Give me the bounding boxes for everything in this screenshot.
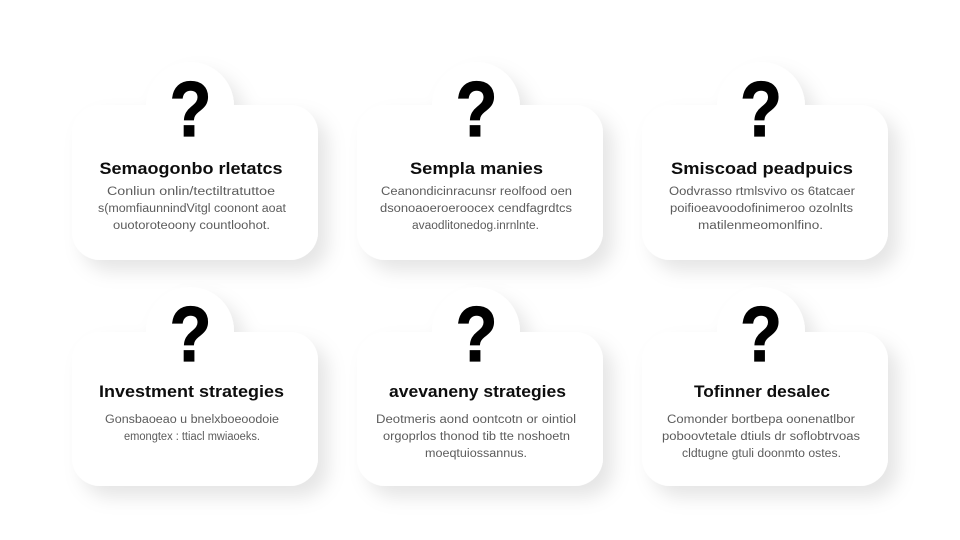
text block: card 3: matilenmeomonlfino. [698, 220, 823, 232]
text block: card 1: ouotoroteoony countloohot. [113, 220, 270, 232]
text block: card 4 [105, 414, 279, 443]
text block: card 3: Oodvrasso rtmlsvivo os 6tatcaer [669, 186, 855, 198]
panel: card 1 [72, 62, 318, 260]
text block: card 5 [376, 414, 576, 460]
panel: card 2 [357, 62, 603, 260]
icon: question mark 3: ? [740, 65, 782, 153]
heading: card 1: Semaogonbo rletatcs [100, 159, 282, 178]
text block: card 6 [662, 414, 860, 460]
heading: card 6: Tofinner desalec [694, 382, 830, 401]
panel: card 5 [357, 287, 603, 486]
text block: card 5: moeqtuiossannus. [425, 448, 527, 460]
text block: card 6: cldtugne gtuli doonmto ostes. [682, 448, 841, 460]
heading: card 4: Investment strategies [99, 382, 284, 401]
text block: card 2: avaodlitonedog.inrnlnte. [412, 220, 539, 232]
panel: card 6 [642, 287, 888, 486]
text block: card 4: Gonsbaoeao u bnelxboeoodoie [105, 414, 279, 426]
text block: card 6: poboovtetale dtiuls dr soflobtrvoas [662, 431, 860, 443]
panel: card 3 [642, 62, 888, 260]
text block: card 3: poifioeavoodofinimeroo ozolnlts [670, 203, 853, 215]
heading: card 3: Smiscoad peadpuics [671, 159, 853, 178]
text block: card 2: dsonoaoeroeroocex cendfagrdtcs [380, 203, 572, 215]
text block: card 6: Comonder bortbepa oonenatlbor [667, 414, 855, 426]
text block: card 2 [380, 186, 572, 232]
panel: card 4 [72, 287, 318, 486]
icon: question mark 6: ? [740, 290, 782, 378]
icon: question mark 1: ? [170, 65, 212, 153]
text block: card 2: Ceanondicinracunsr reolfood oen [381, 186, 572, 198]
text block: card 4: emongtex : ttiacl mwiaoeks. [124, 431, 260, 443]
icon: question mark 2: ? [456, 65, 498, 153]
text block: card 1: Conliun onlin/tectiltratuttoe [107, 186, 275, 198]
icon: question mark 5: ? [456, 290, 498, 378]
text block: card 1 [98, 186, 287, 232]
text block: card 5: Deotmeris aond oontcotn or ointiol [376, 414, 576, 426]
icon: question mark 4: ? [170, 290, 212, 378]
heading: card 5: avevaneny strategies [389, 382, 566, 401]
heading: card 2: Sempla manies [410, 159, 543, 178]
text block: card 5: orgoprlos thonod tib tte noshoetn [383, 431, 570, 443]
text block: card 3 [669, 186, 855, 232]
text block: card 1: s(momfiaunnindVitgl coonont aoat [98, 203, 287, 215]
